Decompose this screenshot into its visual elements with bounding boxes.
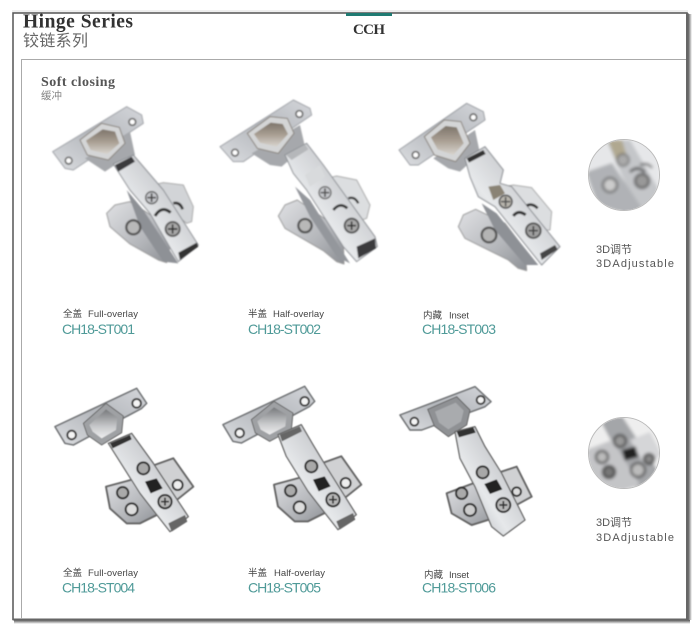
labels: row one: Inset (449, 310, 469, 322)
labels: row one: CH18-ST001 (62, 321, 135, 337)
section heading: soft closing (41, 75, 115, 102)
labels: row one: Full-overlay (88, 309, 138, 320)
logo: CCH: CCH (353, 22, 385, 38)
labels: row one: 全盖 (63, 308, 83, 320)
detail circle: 3D adjustable, bottom (588, 417, 660, 489)
hinge CH18-ST002 (220, 100, 377, 264)
caption: 3D adjustable, top: 3D调节 (596, 243, 632, 256)
caption: 3D adjustable, bottom: 3D调节 (596, 516, 632, 529)
section heading: soft closing: 缓冲 (41, 89, 62, 102)
hinge CH18-ST003 (399, 103, 560, 271)
title: 铰链系列 (23, 32, 88, 50)
labels: row two: Full-overlay (88, 568, 138, 579)
title (23, 12, 133, 50)
labels: row two (62, 567, 496, 596)
caption: 3D adjustable, bottom: 3DAdjustable (596, 532, 674, 544)
hinge CH18-ST004 (55, 388, 193, 532)
labels: row one: 内藏 (423, 310, 443, 322)
labels: row one: CH18-ST002 (248, 321, 321, 337)
labels: row two: CH18-ST005 (248, 580, 321, 596)
logo: CCH (346, 13, 392, 38)
labels: row two: 全盖 (63, 567, 83, 579)
labels: row two: Inset (449, 570, 469, 581)
labels: row one: CH18-ST003 (422, 321, 496, 337)
caption: 3D adjustable, top (596, 243, 674, 270)
labels: row one (62, 308, 496, 337)
caption: 3D adjustable, top: 3DAdjustable (596, 258, 674, 270)
title: Hinge Series (23, 12, 133, 32)
detail circle: 3D adjustable, top (588, 139, 660, 211)
labels: row two: 半盖 (248, 567, 268, 579)
hinge CH18-ST001 (53, 107, 198, 263)
labels: row two: Half-overlay (274, 568, 325, 579)
caption: 3D adjustable, bottom (596, 516, 674, 544)
labels: row two: 内藏 (424, 569, 444, 581)
labels: row two: CH18-ST004 (62, 580, 135, 596)
hinge CH18-ST006 (400, 387, 532, 536)
labels: row one: Half-overlay (273, 309, 324, 320)
hinge CH18-ST005 (223, 386, 361, 530)
labels: row one: 半盖 (248, 308, 268, 320)
labels: row two: CH18-ST006 (422, 580, 496, 596)
section heading: soft closing: Soft closing (41, 75, 115, 90)
